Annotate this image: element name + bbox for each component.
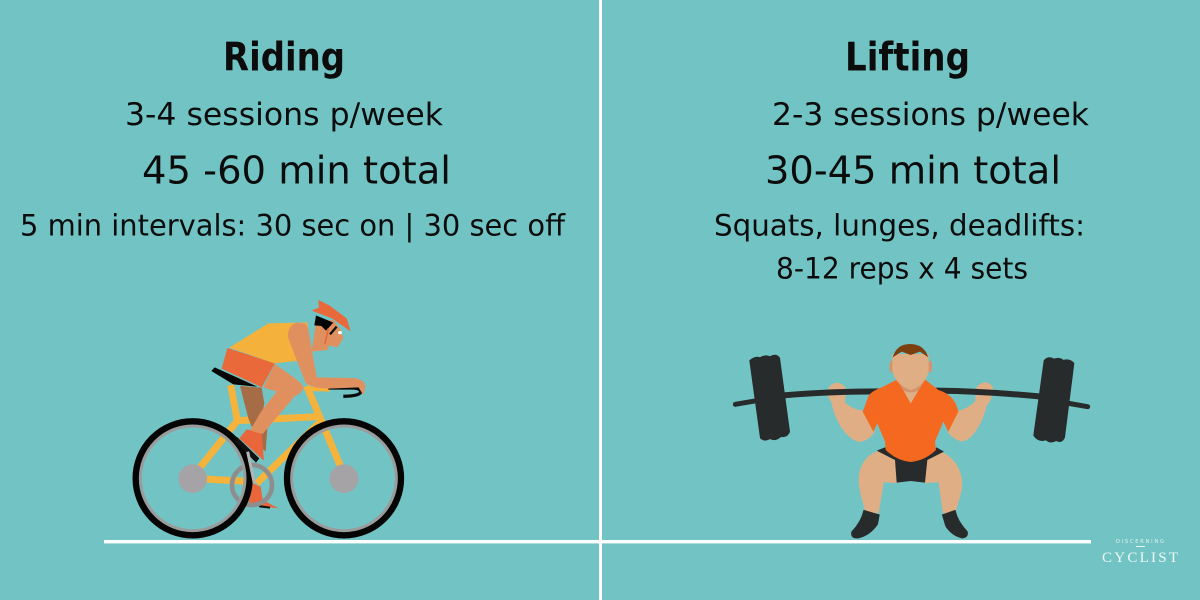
handlebar [328,388,361,396]
left weight plate [750,355,789,440]
barbell [735,391,1088,407]
panel: riding text [20,36,566,242]
shirt [863,379,958,462]
chainring [232,465,272,505]
ears [889,361,894,373]
helmet [312,300,351,331]
rear wheel [136,421,250,535]
icon: weightlifter squatting [735,344,1088,538]
bicycle frame [193,385,341,483]
left shoe [852,511,879,538]
near leg [249,364,303,434]
logo word: Discerning: DISCERNING [1116,539,1165,545]
right weight plate [1034,358,1074,442]
arm [288,323,365,395]
text: riding sessions: 3-4 sessions p/week [125,97,443,133]
right leg [925,452,962,513]
wheel hubs [178,464,358,493]
far foot [248,483,279,508]
saddle [211,367,257,387]
left leg [859,452,897,513]
shorts [877,447,944,483]
text: riding duration: 45 -60 min total [142,148,451,192]
hair [893,344,928,357]
shorts [222,348,275,387]
front wheel [287,421,401,535]
text: lifting exercises: Squats, lunges, deadlifts: [714,208,1085,242]
text: lifting duration: 30-45 min total [765,148,1061,192]
icon: cyclist on bicycle [136,300,401,535]
heading: Riding: Riding [223,36,345,80]
far leg [240,386,267,452]
text: lifting sessions: 2-3 sessions p/week [772,97,1089,133]
helmet strap [330,327,337,334]
eye [338,331,342,334]
crank [248,452,254,483]
hair [314,315,333,331]
logo word: Cyclist: CYCLIST [1102,550,1178,566]
neck and head [312,320,343,352]
text: lifting reps: 8-12 reps x 4 sets [776,252,1028,286]
neck [897,379,925,403]
panel: lifting text [714,36,1089,286]
right shoe [943,511,967,538]
logo: Discerning Cyclist [1102,539,1178,566]
text: riding intervals: 5 min intervals: 30 sec on | 30 sec off [20,208,566,242]
right arm and hand [948,383,993,440]
head [892,354,929,390]
jersey [229,322,311,363]
near shoe [239,429,264,461]
heading: Lifting: Lifting [845,36,970,80]
left arm and hand [829,384,874,441]
